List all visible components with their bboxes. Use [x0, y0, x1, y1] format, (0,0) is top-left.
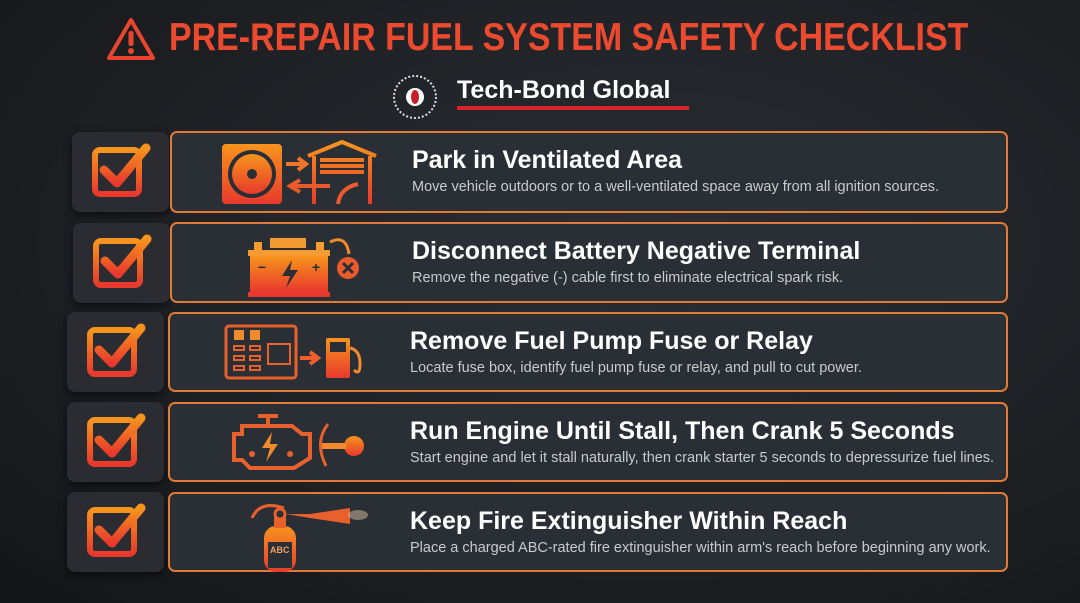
panel 3: Remove Fuel Pump Fuse or Relay — [410, 327, 813, 355]
panel 5: Keep Fire Extinguisher Within Reach — [410, 507, 847, 535]
panel 2 — [170, 222, 1008, 303]
icon: fan and garage — [222, 140, 377, 204]
panel 1: Move vehicle outdoors or to a well-ventilated space away from all ignition sources. — [412, 179, 939, 195]
row 1 — [71, 131, 1008, 216]
row 2 — [72, 222, 1008, 308]
checkbox 1 — [72, 132, 169, 212]
icon: fire extinguisher: ABC — [270, 545, 290, 555]
logo — [393, 75, 689, 119]
panel 3 — [168, 312, 1008, 392]
panel 5 — [168, 492, 1008, 572]
checkbox 3 — [67, 312, 164, 392]
icon: battery: − — [258, 259, 266, 275]
icon: battery — [248, 238, 359, 297]
icon: fire extinguisher — [250, 504, 368, 572]
panel 4: Start engine and let it stall naturally, then crank starter 5 seconds to depressurize fuel lines. — [410, 450, 994, 466]
checkbox 2 — [73, 223, 170, 303]
icon: fuse box to pump — [224, 324, 362, 380]
panel 2: Disconnect Battery Negative Terminal — [412, 237, 860, 265]
icon: warning — [107, 18, 156, 60]
row 4 — [66, 402, 1008, 486]
row 5 — [66, 492, 1008, 576]
icon: engine and key — [232, 414, 364, 470]
logo: Tech-Bond Global — [457, 76, 670, 104]
panel 1 — [170, 131, 1008, 213]
checkbox 5 — [67, 492, 164, 572]
panel 3: Locate fuse box, identify fuel pump fuse or relay, and pull to cut power. — [410, 360, 862, 376]
row 3 — [66, 312, 1008, 396]
title: PRE-REPAIR FUEL SYSTEM SAFETY CHECKLIST — [169, 16, 968, 59]
checkbox 4 — [67, 402, 164, 482]
panel 2: Remove the negative (-) cable first to eliminate electrical spark risk. — [412, 270, 843, 286]
icon: battery: + — [312, 259, 320, 275]
panel 1: Park in Ventilated Area — [412, 146, 682, 174]
panel 5: Place a charged ABC-rated fire extinguisher within arm's reach before beginning any work. — [410, 540, 991, 556]
panel 4: Run Engine Until Stall, Then Crank 5 Seconds — [410, 417, 955, 445]
panel 4 — [168, 402, 1008, 482]
